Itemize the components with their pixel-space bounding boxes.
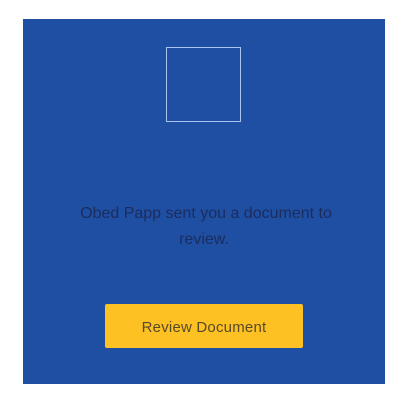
text block: message: Obed Papp sent you a document to	[80, 205, 332, 222]
text block: message	[80, 205, 332, 248]
button: Review Document	[105, 304, 303, 348]
button: Review Document: Review Document	[142, 319, 266, 336]
icon: empty logo placeholder square	[166, 47, 241, 122]
text block: message: review.	[179, 231, 229, 248]
panel: email card background	[23, 19, 385, 384]
